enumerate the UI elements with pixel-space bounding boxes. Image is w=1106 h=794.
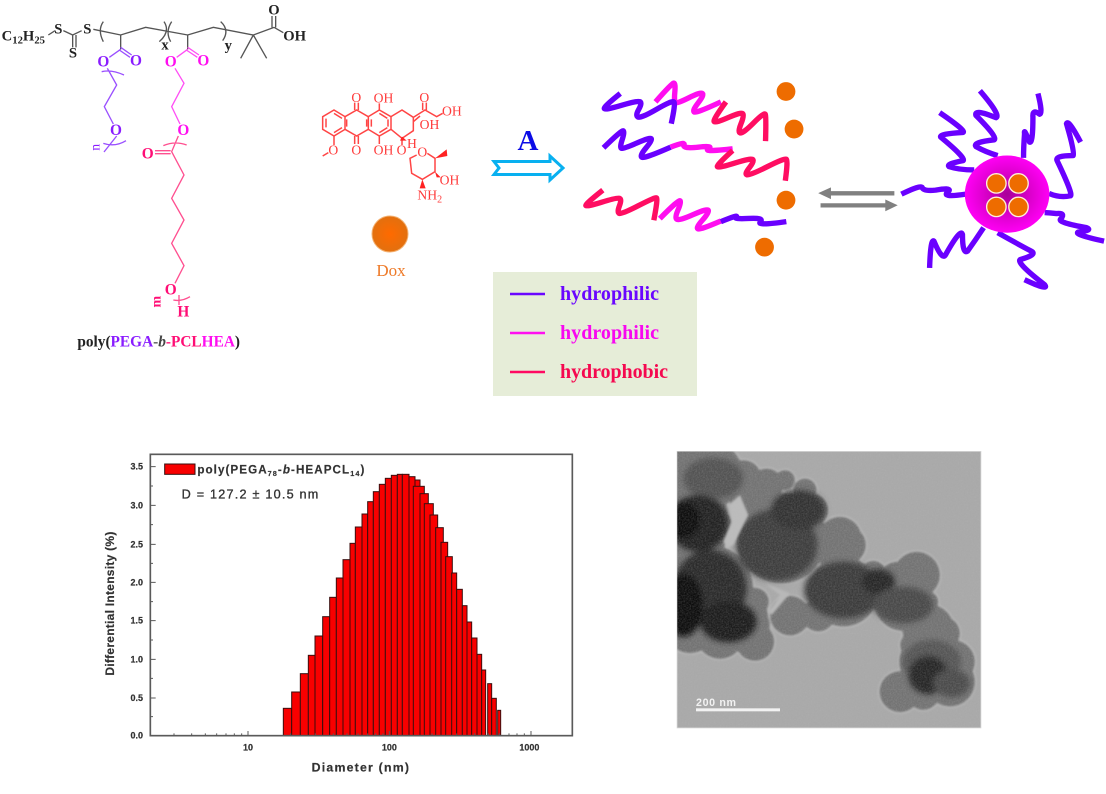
backbone atoms: OH [283, 29, 307, 45]
plot frame and ticks [150, 454, 572, 736]
stereo wedges [400, 137, 447, 188]
doxorubicin molecule [323, 90, 462, 205]
chain 3 [586, 190, 786, 229]
y axis tick labels: 2.5 [130, 539, 143, 549]
atom labels: OH [420, 117, 440, 132]
x axis tick labels [243, 742, 539, 752]
polymer backbone [48, 16, 283, 58]
chart legend: 14 [350, 469, 360, 478]
atom labels: O [351, 143, 361, 158]
PCLHEA side chain: H [177, 304, 189, 321]
y axis tick labels: 1.5 [130, 616, 143, 626]
atom labels: O [328, 143, 338, 158]
scale bar: 200 nm [696, 697, 736, 709]
y axis tick labels: 2.0 [130, 577, 143, 587]
scale bar [696, 697, 780, 711]
free Dox balls [755, 82, 803, 257]
y axis tick labels: 0.0 [130, 731, 143, 741]
legend panel [493, 272, 697, 396]
chart legend: poly(PEGA [197, 463, 267, 476]
chain 1 [604, 83, 766, 141]
x axis tick labels: 100 [382, 742, 397, 752]
particle aggregate [677, 452, 976, 712]
TEM micrograph [676, 451, 982, 728]
atom labels: O [417, 144, 427, 159]
atom labels: OH [374, 143, 394, 158]
backbone atoms: O [268, 3, 280, 19]
backbone atoms: C [2, 29, 12, 45]
polymer name: poly(PEGA-b-PCLHEA) [77, 334, 240, 351]
arrow: hollow cyan reaction arrow [494, 156, 563, 180]
PEGA side chain: O [130, 53, 142, 70]
polymer structure: poly(PEGA-b-PCLHEA) [2, 3, 307, 351]
PCLHEA side chain [142, 47, 209, 321]
reaction label A: A [518, 125, 539, 157]
backbone atoms: S [83, 21, 91, 37]
arrow: equilibrium arrows [818, 187, 898, 211]
backbone atoms: x [161, 37, 169, 53]
backbone atoms: 25 [34, 35, 45, 46]
atom labels [328, 90, 462, 205]
PCLHEA side chain: O [177, 122, 189, 139]
PEGA side chain: O [97, 54, 109, 71]
atom labels: OH [440, 172, 460, 187]
PCLHEA side chain: O [142, 145, 154, 162]
backbone atoms: y [225, 38, 233, 54]
PCLHEA side chain: O [197, 53, 209, 70]
chart legend: b-HEAPCL [283, 463, 349, 476]
Dox label: Dox [376, 261, 406, 280]
chart legend: 78 [268, 469, 277, 478]
PEGA side chain [87, 47, 142, 152]
diameter annotation: D = 127.2 ± 10.5 nm [182, 487, 318, 501]
legend: PCL hydrophobic: hydrophobic [560, 361, 668, 383]
fused rings and bonds [323, 103, 443, 179]
atom labels: 2 [437, 194, 442, 205]
histogram bars [283, 474, 501, 736]
atom labels: OH [442, 103, 462, 118]
backbone atoms: S [54, 21, 62, 37]
atom labels: OH [374, 90, 394, 105]
y axis tick labels [130, 462, 143, 741]
atom labels: O [351, 90, 361, 105]
y axis tick labels: 3.5 [130, 462, 143, 472]
y axis tick labels: 0.5 [130, 693, 143, 703]
backbone atoms: S [69, 45, 77, 61]
chart legend [165, 463, 364, 478]
PCLHEA side chain: m [150, 295, 165, 307]
y axis tick labels: 1.0 [130, 654, 143, 664]
x axis tick labels: 1000 [519, 742, 539, 752]
micelle with loaded Dox [901, 91, 1104, 287]
PEGA side chain: n [87, 144, 102, 151]
backbone atoms [2, 3, 307, 61]
backbone atoms: H [23, 29, 35, 45]
atom labels: H [407, 136, 417, 151]
y axis tick labels: 3.0 [130, 500, 143, 510]
x axis tick labels: 10 [243, 742, 253, 752]
free polymer chains and Dox [586, 82, 1104, 287]
PEGA side chain: O [110, 122, 122, 139]
legend: HEA hydrophilic: hydrophilic [560, 322, 659, 344]
y axis title: Differential Intensity (%) [103, 532, 117, 676]
atom labels: O [397, 143, 407, 158]
x axis title: Diameter (nm) [312, 761, 409, 775]
chain 2 [603, 131, 787, 181]
chart legend: ) [360, 463, 364, 476]
PCLHEA side chain: O [165, 54, 177, 71]
chart legend: - [278, 463, 282, 476]
PCLHEA side chain: O [165, 281, 177, 298]
bar chart: DLS size distribution [103, 454, 572, 775]
atom labels: O [419, 90, 429, 105]
icon: Dox drug ball [372, 216, 408, 252]
atom labels: NH [417, 188, 437, 203]
legend: PEGA hydrophilic: hydrophilic [560, 283, 659, 305]
backbone atoms: 12 [12, 35, 23, 46]
